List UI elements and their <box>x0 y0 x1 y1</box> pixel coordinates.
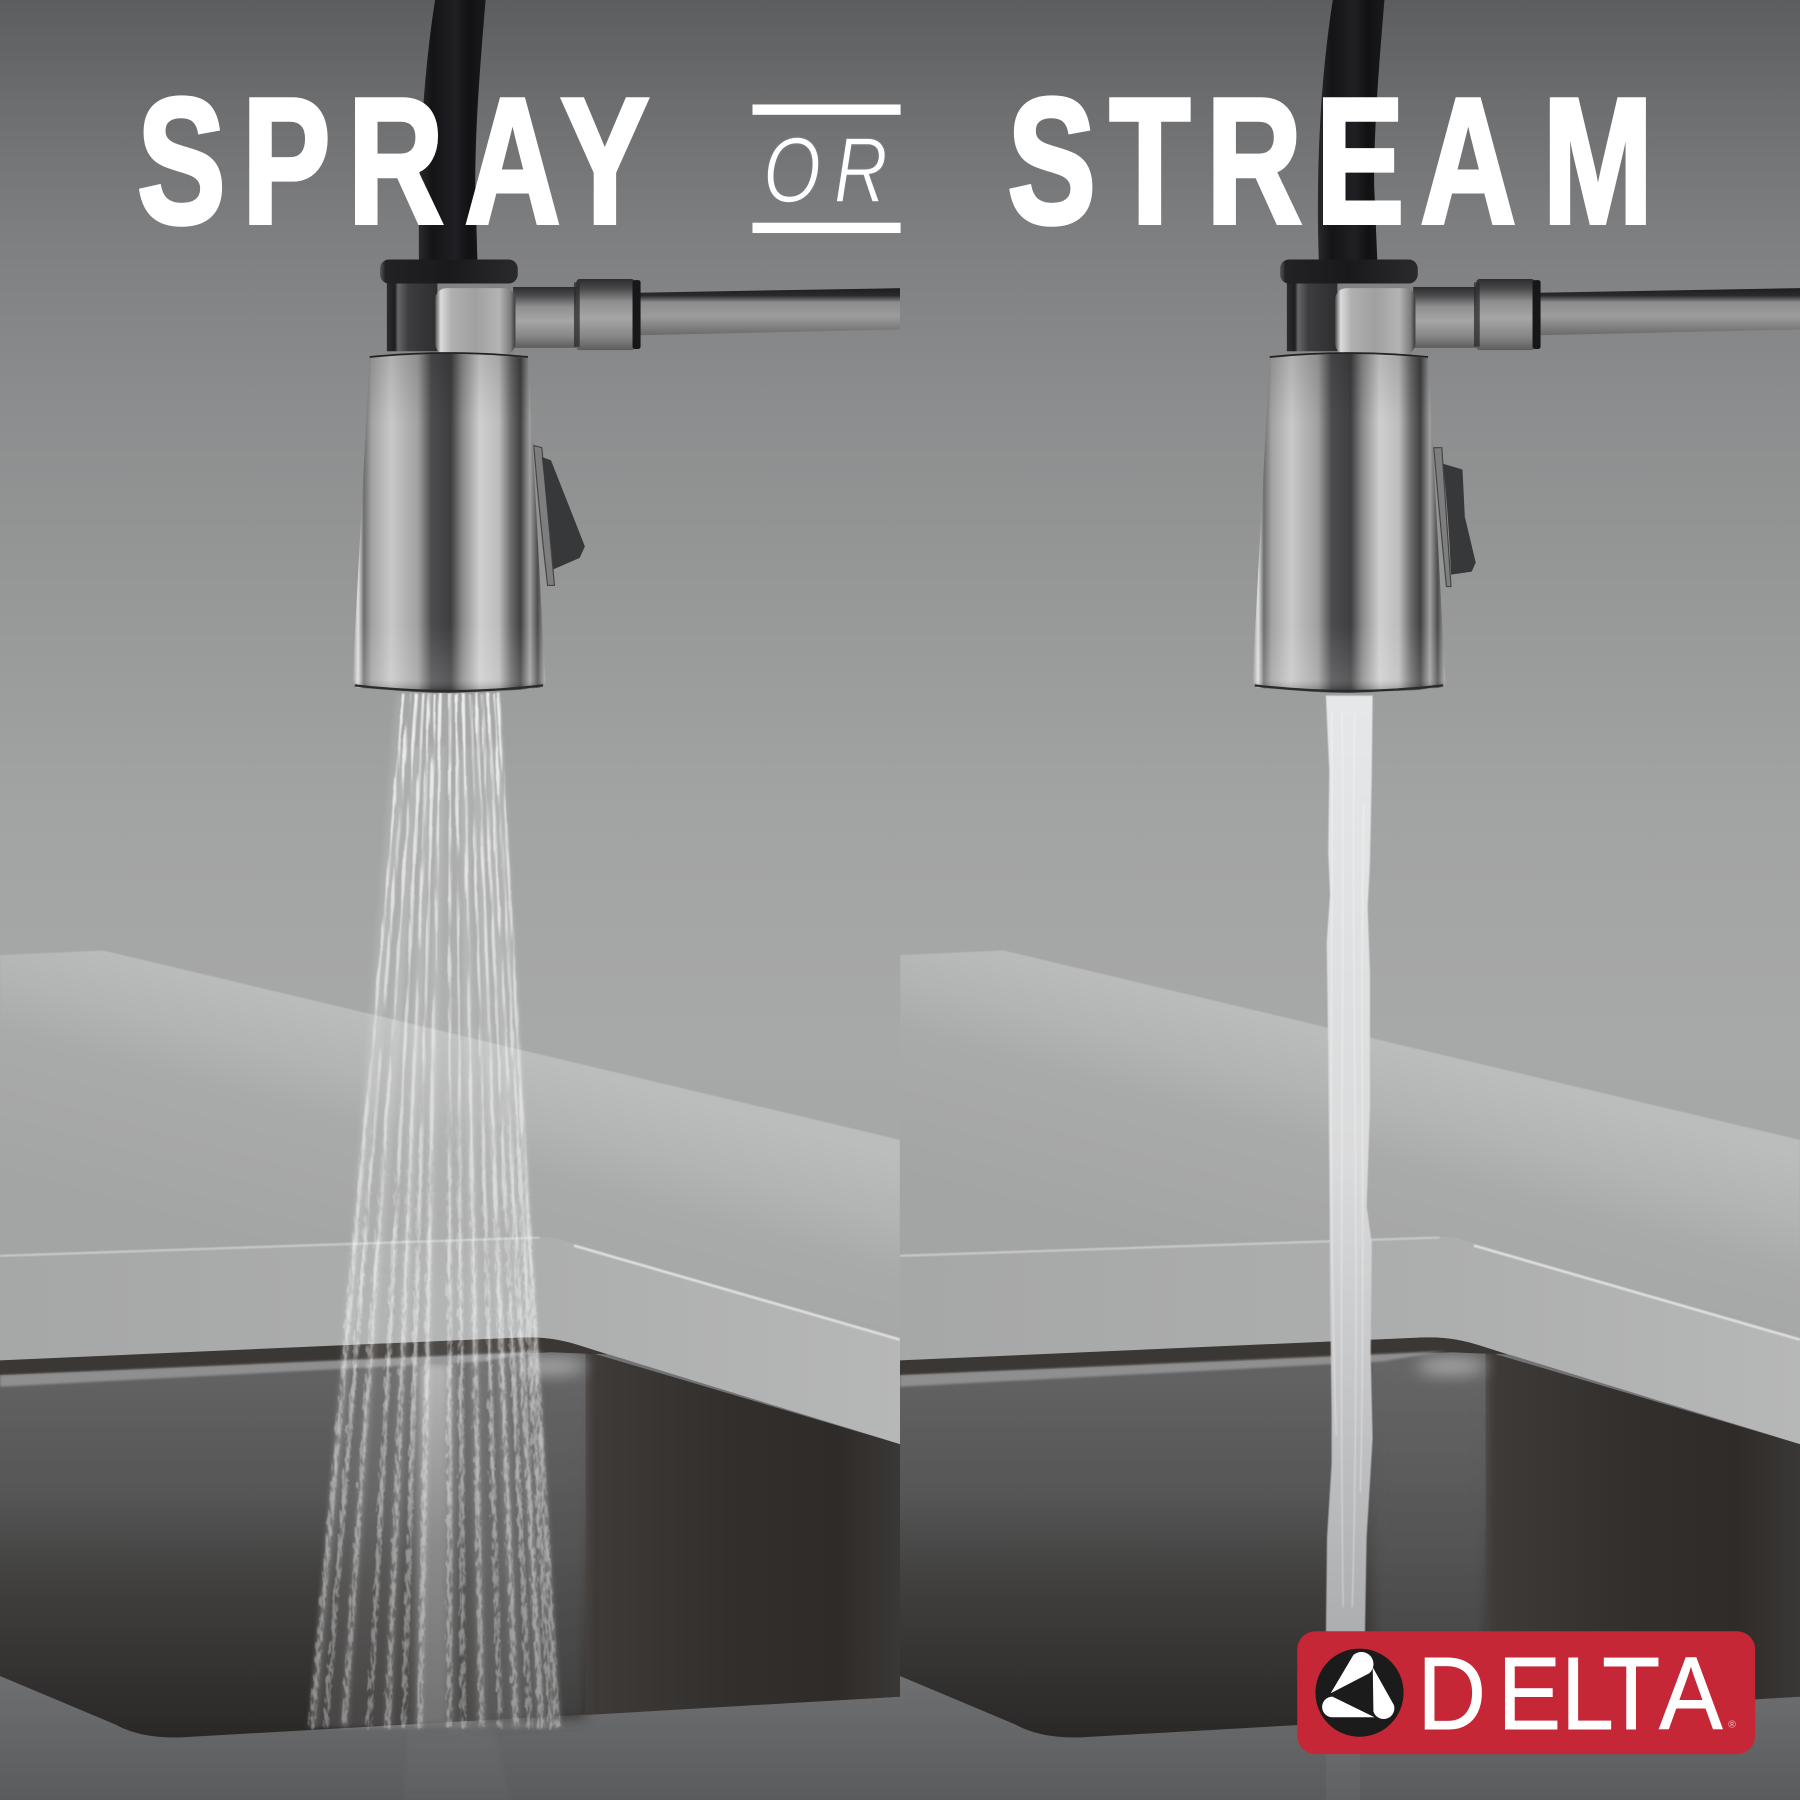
stream texture <box>1331 1050 1364 1607</box>
sink basin <box>900 1350 1800 1737</box>
lower counter base <box>900 1355 1800 1800</box>
panel: spray mode photo <box>0 0 900 1800</box>
faucet: spray head <box>1252 353 1445 693</box>
faint water below logo <box>1326 1745 1360 1800</box>
faucet: spray head <box>352 353 545 693</box>
panel: stream mode photo <box>900 0 1800 1800</box>
lower counter base <box>0 1355 900 1800</box>
faucet: trigger button <box>534 445 585 585</box>
icon: Delta triangle mark <box>1315 1649 1404 1737</box>
faucet: trigger button <box>1434 448 1476 587</box>
sink basin <box>0 1350 900 1737</box>
counter edge and sink rim <box>0 1236 900 1444</box>
registered mark: ® <box>1728 1720 1736 1731</box>
wordmark: DELTA: DELTA <box>1417 1636 1723 1752</box>
faucet: connector body <box>380 259 518 351</box>
background wall <box>0 0 900 1378</box>
spray water streams <box>310 693 558 1728</box>
heading: SPRAY: SPRAY <box>137 61 649 261</box>
counter edge and sink rim <box>900 1236 1800 1444</box>
heading: OR with rules <box>752 104 901 233</box>
faucet: black hose <box>1318 0 1384 266</box>
solid water stream <box>1326 696 1373 1636</box>
heading: OR with rules: OR <box>763 118 888 222</box>
logo: Delta badge <box>1297 1631 1755 1754</box>
heading: STREAM: STREAM <box>1007 61 1653 261</box>
faint water below basin <box>404 1728 511 1800</box>
background wall <box>900 0 1800 1378</box>
faucet: side rod <box>1335 279 1800 355</box>
countertop surface <box>900 950 1800 1247</box>
faucet: side rod <box>435 279 900 355</box>
faucet: connector body <box>1280 259 1418 351</box>
countertop surface <box>0 950 900 1247</box>
faucet: black hose <box>419 0 486 266</box>
